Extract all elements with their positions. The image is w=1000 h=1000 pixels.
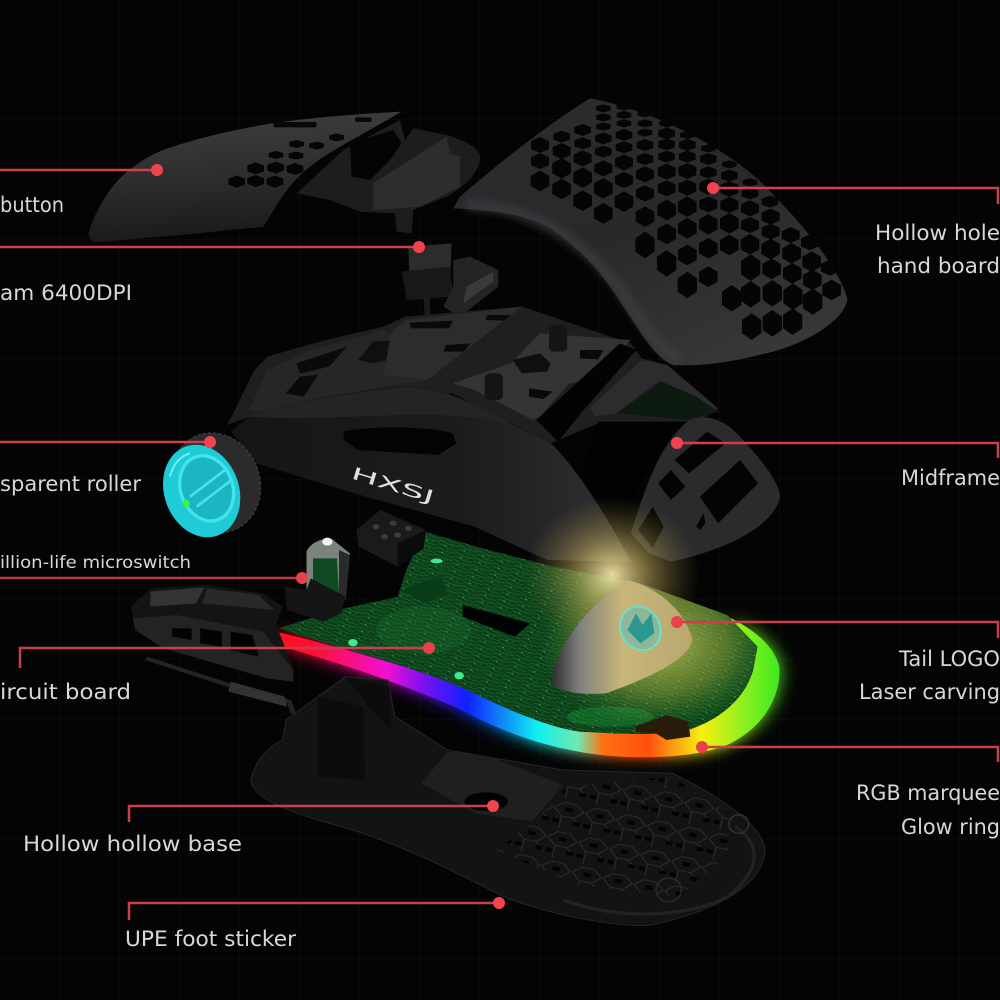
HXSJ logo: HXSJ [349,464,437,508]
circuit board [278,532,758,740]
center plate with posts [453,325,631,420]
tail logo dome [552,580,692,694]
callout: tail logo [671,616,1000,704]
lower body side [231,387,631,562]
dark components [636,715,690,740]
side button grille [133,615,293,682]
base shell [251,677,765,925]
callout: sensor 6400DPI: am 6400DPI [0,281,132,305]
callout: circuit board: ircuit board [0,680,131,704]
left button shell [88,112,480,243]
battery plate [421,752,563,822]
callout: UPE foot sticker [125,897,505,951]
board cutout [352,563,398,602]
callout: midframe: Midframe [901,466,1000,490]
hollow honeycomb shell [453,98,847,365]
shell highlight band [467,206,680,360]
connector on board [402,575,447,603]
base honeycomb [497,777,728,897]
sensor module [402,243,498,340]
left plate with windows [249,330,427,413]
button honeycomb holes [228,117,372,188]
callout: RGB marquee: RGB marquee [856,781,1000,805]
callout: hollow base: Hollow hollow base [23,832,242,856]
transparent roller [150,419,275,548]
side button part [131,585,293,713]
yellow light glow [524,497,700,653]
callout: microswitch: illion-life microswitch [0,553,191,573]
shell hex holes [531,103,841,340]
microswitch and chips [285,510,426,622]
base pillars [318,677,391,780]
logo emblem [616,604,665,653]
callout: tail logo: Laser carving [859,680,1000,704]
roller cyan wheel [150,434,253,548]
callout: hollow base [23,800,499,856]
callout: tail logo: Tail LOGO [898,647,1000,671]
callout: hollow hole hand board [707,182,1000,278]
upper top plate [384,307,522,380]
switch body [285,578,346,622]
roller tyre [156,419,275,546]
rear opening [582,422,691,527]
green LEDs [348,559,464,679]
board slot [463,605,530,637]
upper chassis [227,307,718,443]
callout: transparent roller [0,436,216,496]
midframe [227,307,780,562]
callout: button: button [0,193,64,217]
callout: RGB marquee [696,741,1000,839]
rear arch [591,360,718,417]
side button cable [146,658,293,713]
chip block [356,510,426,567]
callout: button [0,164,163,217]
callout: transparent roller: sparent roller [0,472,141,496]
hollow base [251,677,765,925]
ring halo [276,617,779,757]
callout: RGB marquee: Glow ring [901,815,1000,839]
callout: circuit board [0,642,435,704]
base center hole [464,792,508,811]
callout: UPE foot sticker: UPE foot sticker [125,927,296,951]
shell body [453,98,847,365]
base rim [563,827,754,914]
black strip [536,343,636,442]
button top surface [88,112,402,243]
callout: midframe [671,437,1000,490]
ring band [276,617,779,757]
callout: hollow hole hand board: hand board [877,254,1000,278]
callout: hollow hole hand board: Hollow hole [875,221,1000,245]
rear cage [631,417,780,562]
side button base [131,585,293,682]
callout: microswitch [0,553,308,584]
switch cap [306,539,350,600]
button underside and ramps [297,120,480,233]
side button top [150,587,205,607]
side opening [344,427,456,455]
RGB glow ring [276,617,779,757]
callout: sensor 6400DPI [0,241,425,305]
